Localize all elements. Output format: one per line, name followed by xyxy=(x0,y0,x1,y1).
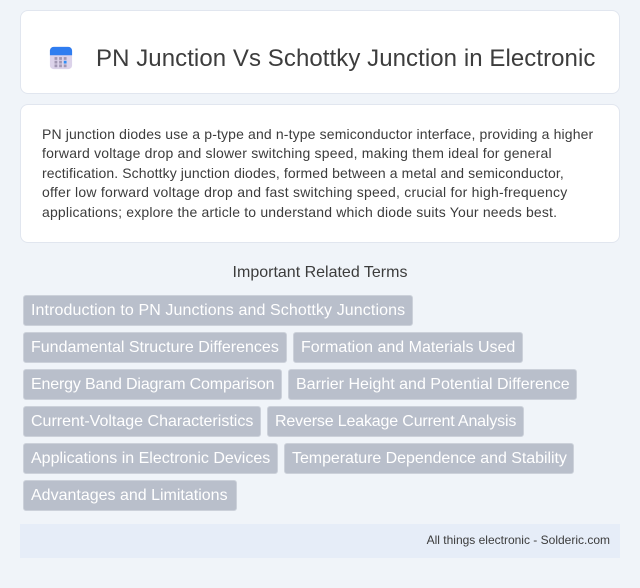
footer bar xyxy=(20,524,620,558)
footer credit: All things electronic - Solderic.com xyxy=(427,533,610,547)
intro text panel xyxy=(20,104,620,243)
tag list: Fundamental Structure Differences xyxy=(31,339,279,356)
tag list: Formation and Materials Used xyxy=(301,339,515,356)
tag list xyxy=(23,295,577,511)
paragraph: forward voltage drop and slower switching speed, making them ideal for general xyxy=(42,145,552,161)
paragraph xyxy=(42,126,593,220)
tag list: Temperature Dependence and Stability xyxy=(292,450,567,467)
paragraph: rectification. Schottky junction diodes, formed between a metal and semiconductor, xyxy=(42,165,564,181)
header panel xyxy=(20,10,620,94)
tag list: Current-Voltage Characteristics xyxy=(31,413,253,430)
tag list: Applications in Electronic Devices xyxy=(31,450,270,467)
tag list: Barrier Height and Potential Difference xyxy=(296,376,570,393)
paragraph: offer low forward voltage drop and fast switching speed, crucial for high-frequency xyxy=(42,184,567,200)
tag list: Introduction to PN Junctions and Schottky Junctions xyxy=(31,302,405,319)
paragraph: PN junction diodes use a p-type and n-type semiconductor interface, providing a higher xyxy=(42,126,593,142)
icon: calendar xyxy=(50,46,72,70)
tag list: Advantages and Limitations xyxy=(31,487,228,504)
heading: related terms: Important Related Terms xyxy=(233,264,407,281)
paragraph: applications; explore the article to understand which diode suits Your needs best. xyxy=(42,204,557,220)
tag list: Reverse Leakage Current Analysis xyxy=(275,413,516,430)
tag list: Energy Band Diagram Comparison xyxy=(31,376,274,393)
title: PN Junction Vs Schottky Junction in Electronic xyxy=(96,45,595,72)
